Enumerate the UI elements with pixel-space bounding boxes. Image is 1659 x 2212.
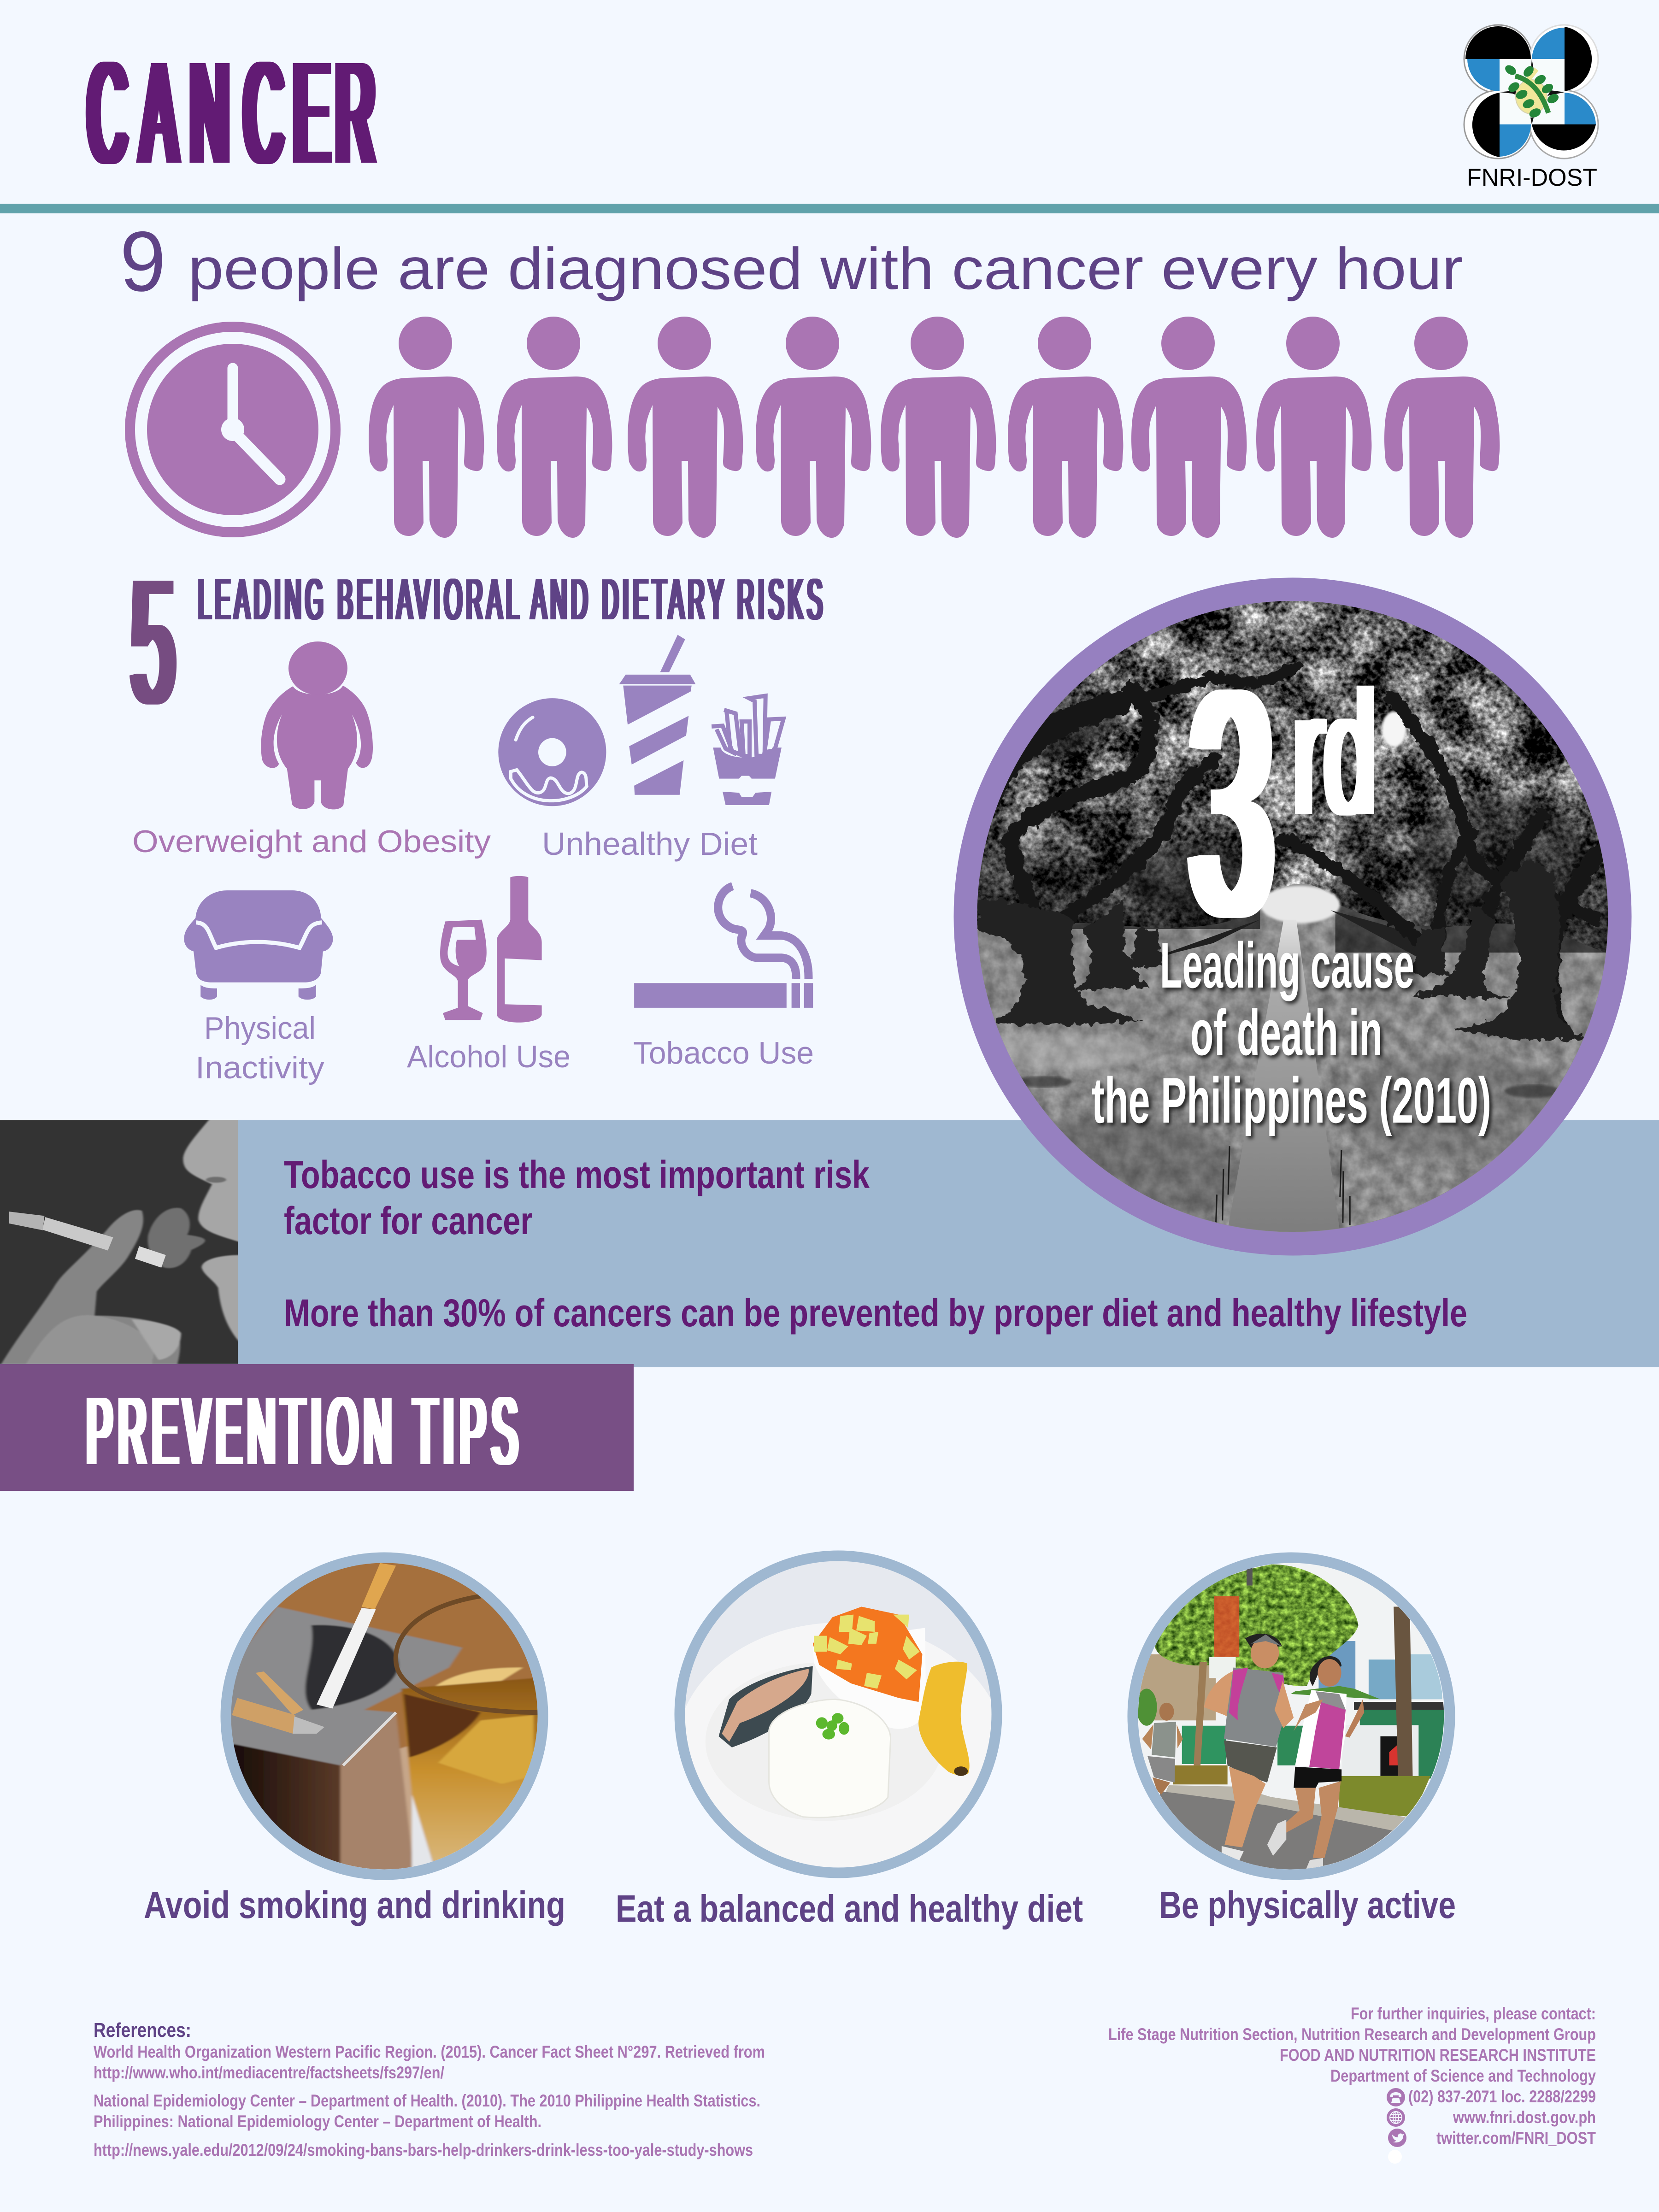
people row: nine figures [369,317,1500,538]
person 2 [497,317,612,538]
website: www.fnri.dost.gov.ph [1453,2108,1596,2127]
leading cause caption: of death in [1190,996,1382,1069]
icon: blank white dot [1388,2150,1402,2164]
heading text: people are diagnosed with cancer every hour [188,236,1463,302]
big number 5: 5 [131,543,175,741]
photo ring [680,1556,997,1873]
statistic heading [120,214,1463,309]
icon: globe [1387,2108,1405,2127]
logo: FNRI-DOST [1464,25,1598,159]
twitter handle: twitter.com/FNRI_DOST [1436,2129,1596,2147]
person 8 [1256,317,1371,538]
tip: avoid smoking and drinking [144,1554,565,1926]
contact intro: For further inquiries, please contact: [1351,2004,1596,2023]
logo wordmark: FNRI-DOST [1467,164,1597,191]
label: alcohol use: Alcohol Use [407,1039,571,1074]
blue message band [0,1120,1659,1367]
photo ring [1133,1558,1450,1875]
reference: National Epidemiology Center: National Epidemiology Center – Department of Health. (2010). The 2010 Philippine Health Statistics. [94,2091,760,2110]
photo ring [226,1558,543,1875]
big number 9: 9 [120,214,166,309]
person 1 [369,317,484,538]
reference: WHO [94,2042,765,2082]
donut [498,698,606,806]
photo: runners [1134,1559,1451,1874]
contact department: Department of Science and Technology [1330,2066,1596,2085]
message: tobacco risk factor [284,1153,870,1242]
message: tobacco risk factor: Tobacco use is the most important risk [284,1153,870,1196]
tip: balanced diet [616,1556,1083,1930]
icon: clock [130,327,335,532]
tip label: Be physically active [1159,1883,1456,1926]
phone number: (02) 837-2071 loc. 2288/2299 [1408,2087,1596,2106]
icon: twitter bird [1388,2129,1406,2147]
person 6 [1008,317,1123,538]
tip label: Eat a balanced and healthy diet [616,1887,1083,1930]
leading cause caption: Leading cause [1160,929,1414,1001]
photo: smoker [0,1118,241,1366]
tip label: Avoid smoking and drinking [144,1883,565,1926]
icon: sofa [184,890,333,1000]
icon: phone [1387,2088,1405,2106]
title: CANCER [88,32,375,194]
reference: WHO: http://www.who.int/mediacentre/factsheets/fs297/en/ [94,2063,444,2082]
reference: Yale: http://news.yale.edu/2012/09/24/smoking-bans-bars-help-drinkers-drink-less-too-yale-study-shows [94,2141,753,2159]
fries [712,696,783,805]
tip: physically active [1133,1558,1456,1926]
label: overweight and obesity: Overweight and Obesity [132,824,491,859]
soda cup [619,635,695,795]
photo: plate of food [677,1556,1004,1877]
person 3 [628,317,743,538]
teal divider bar [0,204,1659,213]
person 4 [756,317,871,538]
message: tobacco risk factor: factor for cancer [284,1199,533,1242]
references heading: References: [94,2019,191,2041]
person 5 [881,317,996,538]
reference: WHO: World Health Organization Western Pacific Region. (2015). Cancer Fact Sheet N°297. Retrieved from [94,2042,765,2061]
contact block [1108,2004,1596,2164]
reference: National Epidemiology Center: Philippines: National Epidemiology Center – Department of Health. [94,2112,541,2131]
reference: National Epidemiology Center [94,2091,760,2131]
photo: ashtray and whisky [216,1554,555,1877]
panel: 3rd leading cause circle [965,589,1627,1244]
big numeral 3: 3 [1191,623,1271,983]
contact institute: FOOD AND NUTRITION RESEARCH INSTITUTE [1280,2046,1596,2065]
circle ring [965,589,1620,1244]
label: physical inactivity [195,1011,324,1085]
man runner [1204,1634,1294,1861]
back runner [1142,1703,1183,1794]
icon: unhealthy food [498,635,783,806]
prevention tips banner [0,1364,634,1491]
woman runner [1267,1656,1364,1869]
photo: tree avenue [969,600,1627,1239]
icon: wine glass and bottle [440,876,542,1023]
person 9 [1384,317,1500,538]
icon: cigarette and smoke [634,886,813,1008]
leading cause caption [1092,929,1491,1136]
risks heading: LEADING BEHAVIORAL AND DIETARY RISKS [198,567,823,632]
icon: overweight figure [261,641,373,809]
label: tobacco use: Tobacco Use [633,1035,814,1071]
label: physical inactivity: Physical [204,1011,316,1046]
label: unhealthy diet: Unhealthy Diet [542,826,758,862]
prevention tips heading: PREVENTION TIPS [87,1377,518,1485]
person 7 [1131,317,1247,538]
references block [94,2019,765,2159]
label: physical inactivity: Inactivity [195,1050,324,1085]
ordinal rd: rd [1293,653,1376,851]
